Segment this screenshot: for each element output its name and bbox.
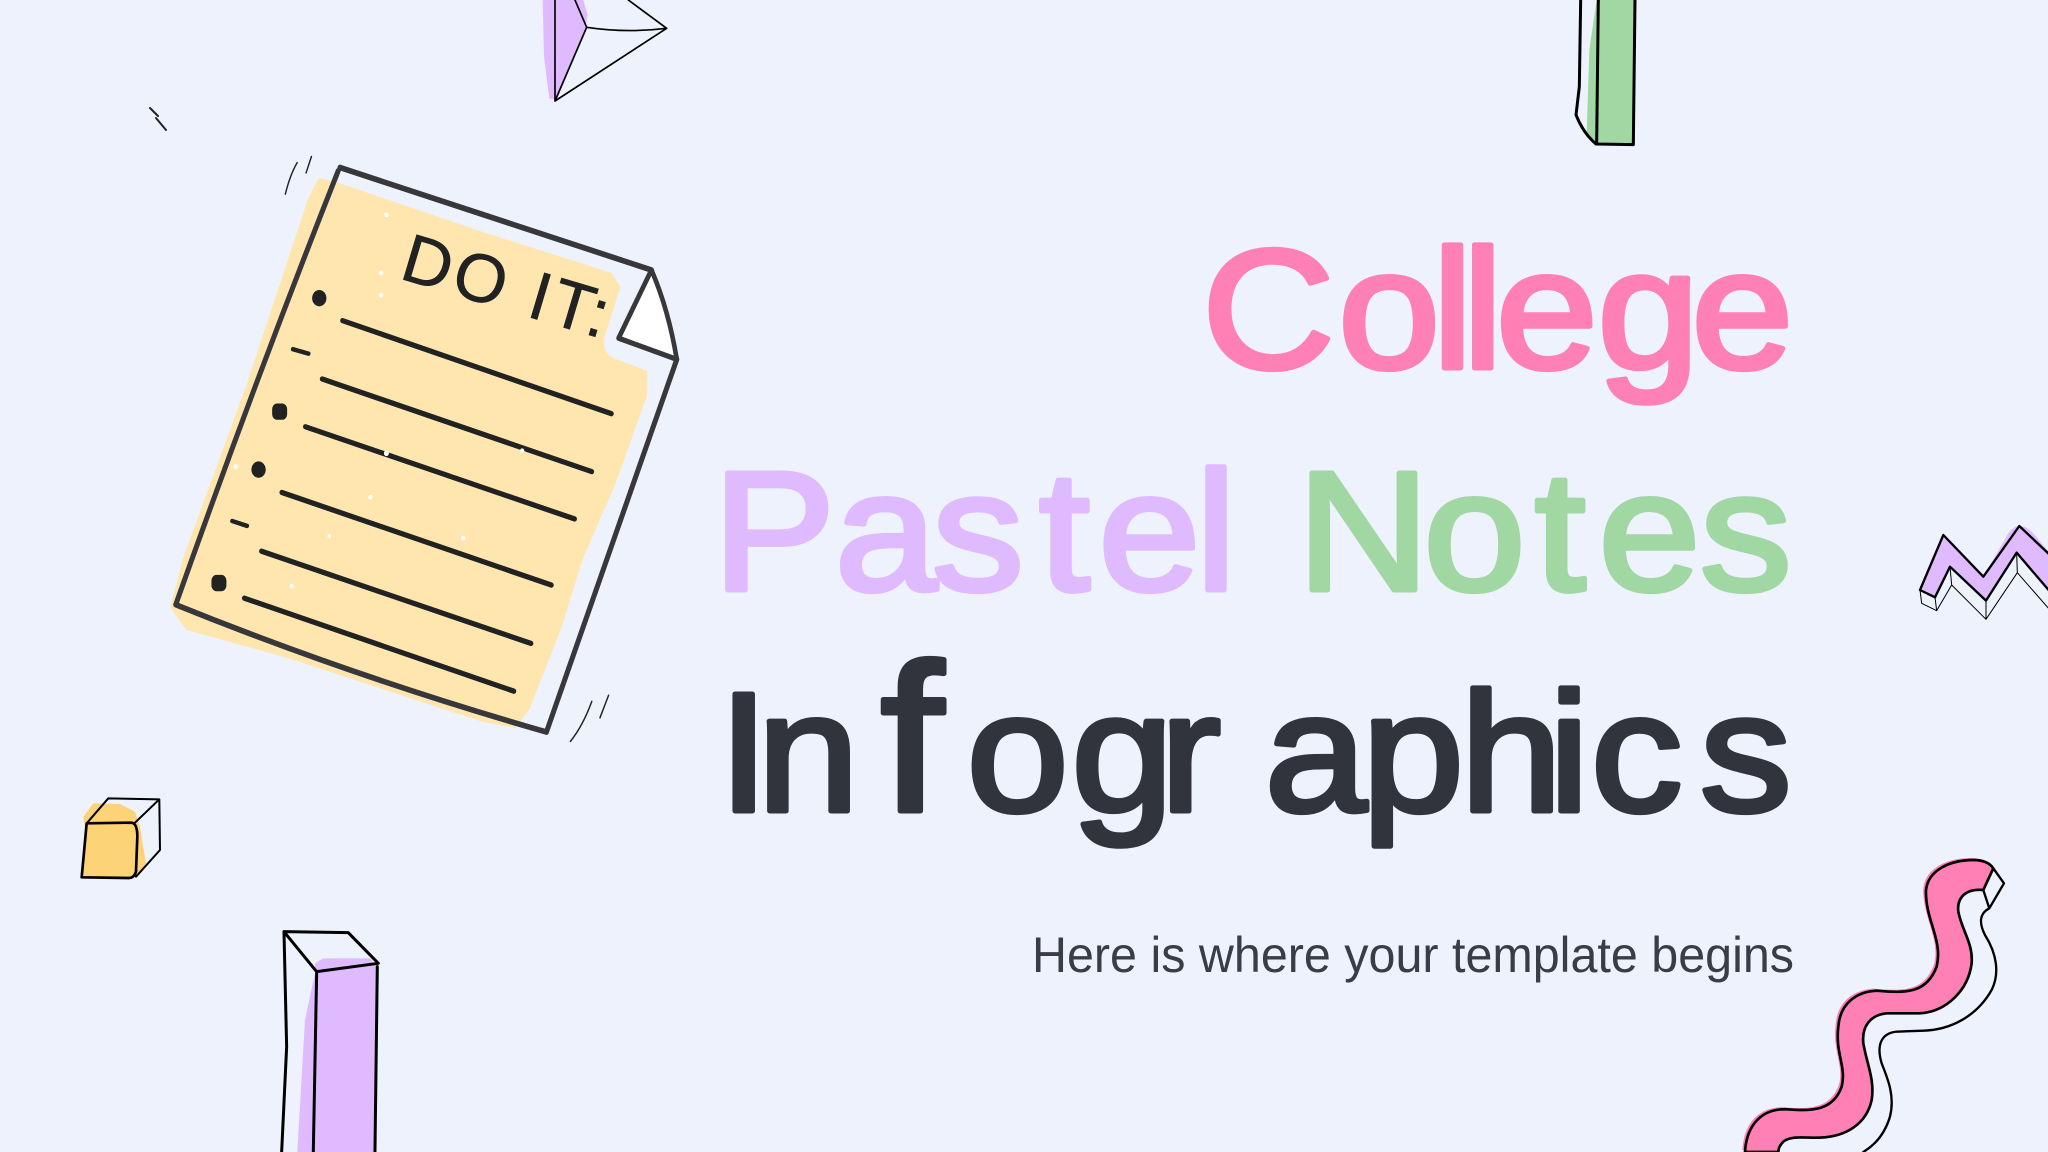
- icon: purple prism bottom: [282, 932, 378, 1152]
- note motion ticks: [285, 157, 609, 741]
- icon: green prism top: [1576, 0, 1635, 145]
- title line: Pastel Notes: [713, 437, 1792, 627]
- subtitle: Here is where your template begins: [1032, 927, 1794, 983]
- icon: purple pyramid top: [543, 0, 667, 101]
- note paint specks: [234, 212, 524, 589]
- icon: to-do note: [170, 157, 677, 741]
- note yellow paint: [170, 178, 647, 728]
- note heading: DO IT:: [394, 220, 619, 353]
- icon: small tick marks top left: [150, 108, 166, 130]
- folded corner: [619, 270, 677, 359]
- note bullets: [211, 290, 326, 591]
- title: [713, 215, 1793, 856]
- icon: pink squiggle: [1742, 858, 2004, 1152]
- title line: Infographics: Infographics: [718, 620, 1792, 856]
- note list lines: [244, 321, 611, 691]
- title line: Pastel Notes: Notes: [1297, 437, 1792, 627]
- note artwork: [170, 157, 677, 741]
- icon: yellow cube: [82, 798, 160, 878]
- title line: Pastel Notes: Pastel: [713, 437, 1236, 627]
- icon: purple zigzag right edge: [1920, 526, 2048, 619]
- title line: College: College: [1202, 215, 1793, 405]
- note outline: [176, 168, 677, 732]
